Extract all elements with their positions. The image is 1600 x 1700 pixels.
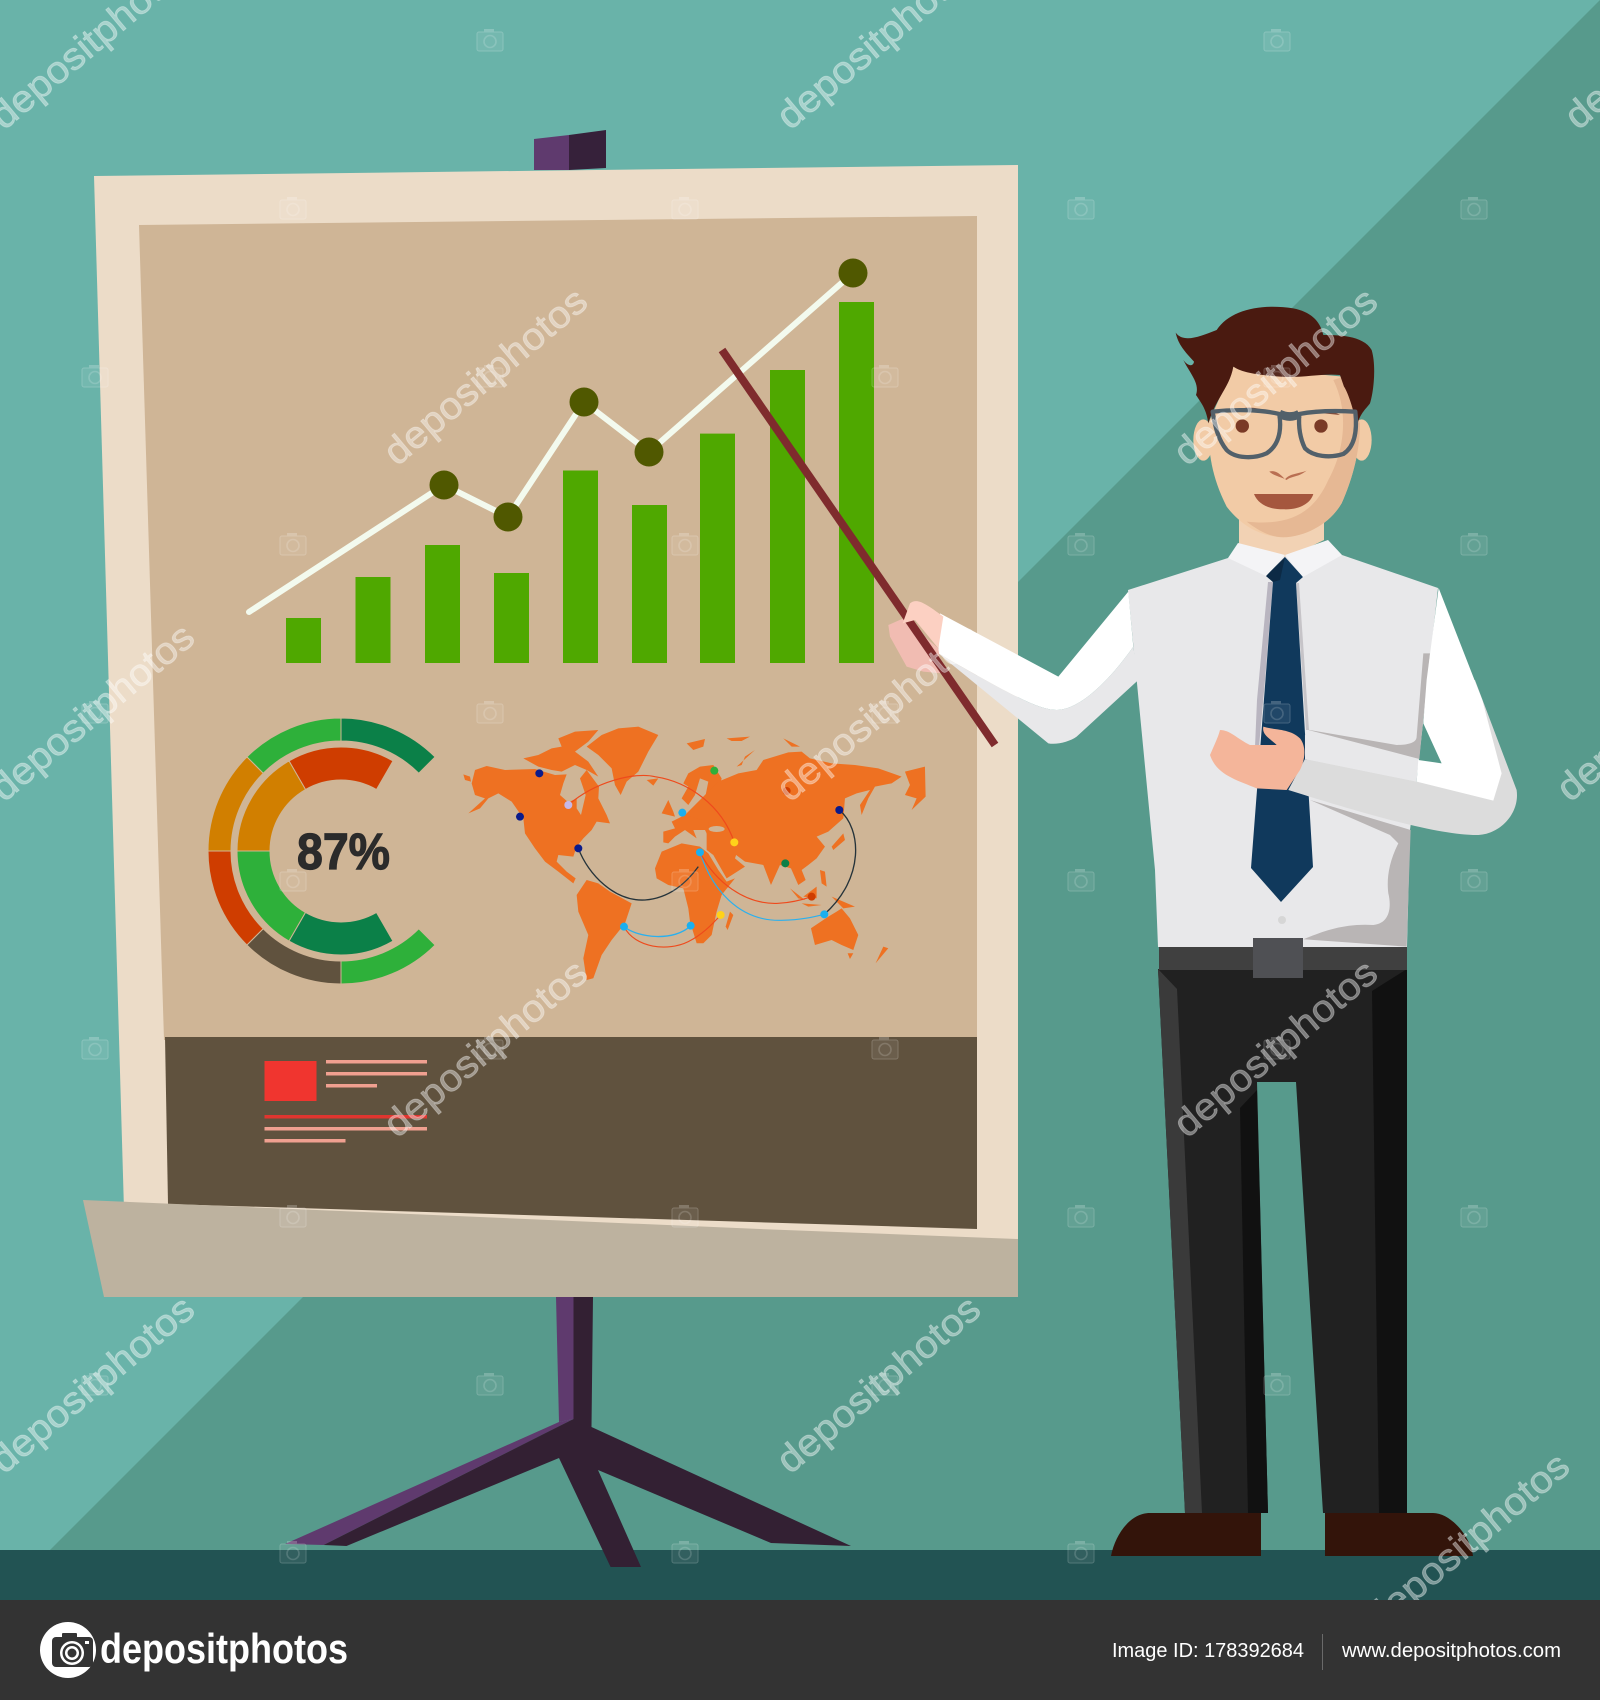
nose — [1269, 471, 1307, 480]
flipchart stand — [285, 1297, 851, 1567]
glasses — [1213, 410, 1356, 457]
watermark wordmarks: depositphotos — [1166, 952, 1386, 1146]
hair — [1176, 307, 1374, 427]
presenter: shirt torso — [1128, 555, 1438, 947]
dark legend panel — [165, 1037, 977, 1229]
footer bar — [0, 1600, 1600, 1700]
presenter: fingers over pointer — [903, 601, 943, 648]
bar chart — [286, 302, 874, 663]
presenter: shoes — [1111, 1513, 1473, 1556]
watermark wordmarks: depositphotos — [1166, 280, 1386, 474]
footer divider — [1322, 1634, 1323, 1670]
footer website: www.depositphotos.com — [1341, 1640, 1561, 1662]
face — [1208, 367, 1360, 537]
presenter: collar — [1228, 540, 1342, 577]
presenter: trousers — [1158, 969, 1407, 1513]
watermark wordmarks: depositphotos — [769, 1288, 989, 1482]
presenter: palm holding pointer — [888, 618, 942, 673]
ears — [1193, 419, 1372, 461]
footer logo wordmark: depositphotos — [100, 1625, 348, 1672]
pupils — [1236, 419, 1328, 433]
watermark wordmarks: depositphotos — [376, 952, 596, 1146]
mouth — [1254, 494, 1313, 509]
flipchart top clip — [534, 130, 606, 170]
floor strip — [0, 1550, 1600, 1600]
presenter: belt — [1159, 938, 1407, 978]
board bottom flap — [83, 1200, 1018, 1297]
gauge value: 87% — [297, 823, 390, 880]
chart paper — [139, 216, 977, 1040]
watermark wordmarks: depositphotos — [1358, 1445, 1578, 1639]
footer image id: Image ID: 178392684 — [1112, 1640, 1304, 1662]
line chart — [249, 258, 868, 612]
presenter: tie — [1251, 557, 1313, 902]
eyebrows — [1235, 408, 1340, 415]
footer logo icon — [40, 1622, 96, 1678]
face shade — [1247, 377, 1360, 537]
presenter: left arm raised — [938, 592, 1138, 744]
presenter: head — [1176, 307, 1374, 537]
presenter: right arm across chest — [1288, 588, 1517, 835]
pointer stick — [722, 350, 995, 745]
presenter: shirt button — [1278, 916, 1286, 924]
presenter: neck — [1239, 515, 1324, 558]
legend block — [264, 1060, 427, 1142]
watermark wordmarks: depositphotos — [376, 280, 596, 474]
flipchart board frame — [94, 165, 1018, 1245]
donut gauge — [208, 718, 435, 984]
world map — [463, 727, 926, 980]
presenter: shirt folds and shadow — [1255, 582, 1430, 947]
watermark wordmarks: depositphotos — [769, 616, 989, 810]
watermark camera icons — [82, 29, 1487, 1563]
presenter: hand on tie — [1210, 727, 1304, 790]
